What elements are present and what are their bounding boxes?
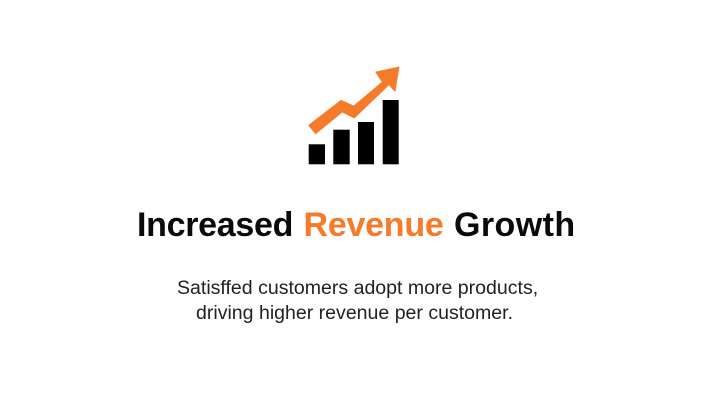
arrow [309, 67, 399, 134]
bar 1 [309, 144, 325, 164]
bar 4 [383, 100, 399, 164]
subtitle text: driving higher revenue per customer. [196, 302, 513, 324]
bar 2 [333, 130, 350, 164]
bar 3 [358, 122, 374, 164]
title: Increased Revenue Growth [137, 206, 576, 244]
subtitle text: Satisffed customers adopt more products, [177, 277, 538, 299]
subtitle text [177, 277, 538, 324]
icon: rising bar chart with arrow [308, 66, 400, 164]
